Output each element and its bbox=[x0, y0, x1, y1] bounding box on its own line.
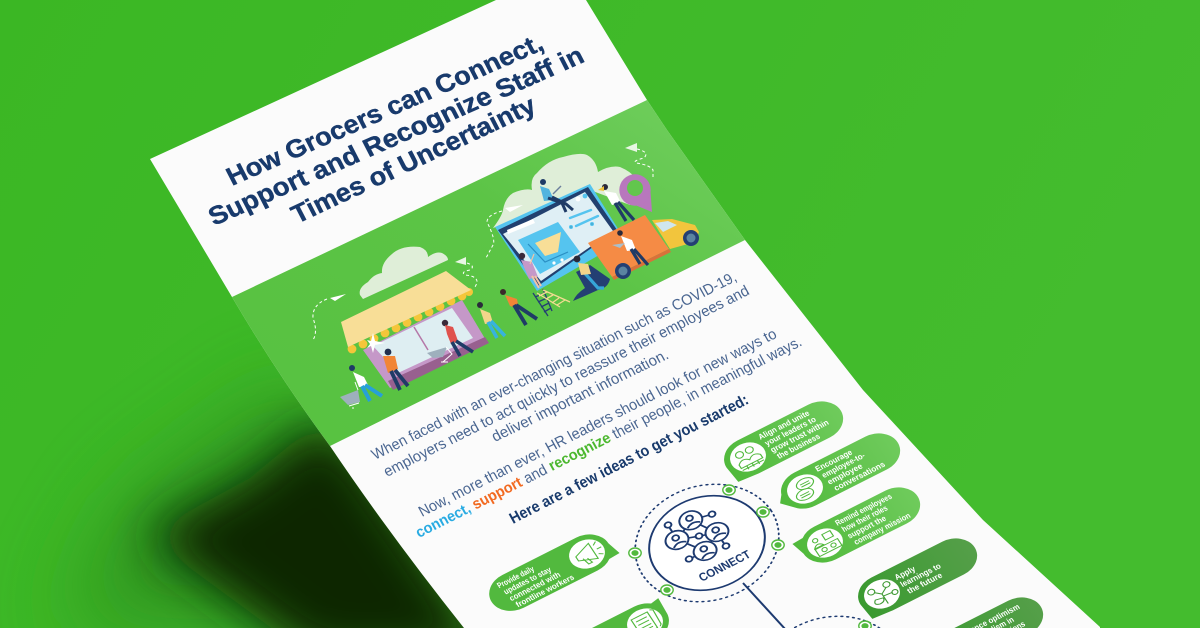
person sitting on monitor bbox=[540, 179, 573, 212]
icon: presenter at desk bbox=[809, 530, 842, 557]
dashed flight path left bbox=[313, 299, 327, 340]
title: Times of Uncertainty bbox=[287, 91, 541, 230]
window divider bbox=[414, 327, 428, 350]
bubble: daily updates: connected with bbox=[507, 570, 562, 603]
network people icon bbox=[655, 500, 739, 572]
man with phone bbox=[500, 289, 537, 325]
woman in yellow bbox=[477, 302, 505, 338]
bubble: daily updates: updates to stay bbox=[502, 565, 554, 596]
title: Support and Recognize Staff in bbox=[204, 41, 589, 232]
cloud behind monitor bbox=[493, 154, 637, 228]
bubble: employee conversations: Encourage bbox=[813, 448, 854, 473]
address bar bbox=[507, 219, 535, 234]
intro text block: employers need to act quickly to reassure their employees and bbox=[380, 282, 752, 480]
paper plane right bbox=[455, 257, 466, 265]
bubble: employee conversations: conversations bbox=[832, 460, 887, 493]
bubble: company mission: how their roles bbox=[840, 504, 889, 534]
cart in window bbox=[427, 347, 452, 362]
shop wall bbox=[363, 300, 487, 388]
connect hub diagram bbox=[611, 462, 803, 624]
next hub dotted ring bbox=[734, 594, 926, 628]
shop base bbox=[388, 337, 489, 390]
illustration: storefront scene bbox=[313, 247, 537, 408]
cart frame and wheels bbox=[528, 244, 568, 265]
icon: growth tree bbox=[867, 579, 902, 609]
shop awning bbox=[341, 271, 471, 347]
bubble: align leaders: your leaders to bbox=[763, 415, 818, 448]
bubble: apply learnings: Apply bbox=[893, 564, 918, 582]
icon: checklist bbox=[631, 609, 663, 628]
dashed flight path by monitor bbox=[486, 211, 502, 258]
second paragraph: Now, more than ever, HR leaders should look for new ways to bbox=[415, 325, 780, 520]
bubble: apply learnings bbox=[850, 531, 985, 621]
bubble: apply learnings: learnings to bbox=[899, 561, 943, 589]
cart panel bbox=[518, 222, 580, 274]
bubble: align leaders: grow trust within bbox=[769, 418, 830, 454]
bubble: align leaders: the business bbox=[775, 432, 822, 461]
woman on ladder bbox=[519, 253, 541, 288]
monitor frame bbox=[495, 184, 625, 291]
bubble: employee conversations: employee-to- bbox=[820, 451, 867, 480]
woman sitting bbox=[573, 256, 610, 301]
screen text lines bbox=[570, 210, 598, 228]
outer dotted ring bbox=[611, 462, 803, 624]
monitor bezel bbox=[498, 187, 617, 286]
bubble: company mission: company mission bbox=[852, 511, 912, 547]
paper plane left bbox=[330, 294, 346, 301]
navy ladder bbox=[533, 289, 552, 316]
monitor screen bbox=[503, 192, 613, 281]
paper plane top bbox=[625, 143, 637, 152]
cloud above shop bbox=[360, 247, 448, 299]
ring nodes bbox=[629, 485, 871, 628]
cargo box lower edge bbox=[612, 249, 671, 280]
shop window bbox=[373, 308, 473, 373]
title: How Grocers can Connect, bbox=[222, 29, 548, 192]
bubble: company mission bbox=[789, 480, 928, 572]
dashed flight path top bbox=[635, 149, 653, 177]
person with megaphone bbox=[598, 184, 634, 221]
illustration: online store scene bbox=[486, 143, 699, 316]
cart basket bbox=[535, 232, 561, 256]
bubble: align leaders: Align and unite bbox=[756, 409, 811, 441]
bubble: apply learnings: the future bbox=[905, 571, 944, 595]
connect label: CONNECT bbox=[696, 548, 753, 584]
icon: megaphone bbox=[572, 539, 607, 567]
browser dots bbox=[576, 194, 587, 201]
intro text block: When faced with an ever-changing situation such as COVID-19, bbox=[368, 268, 740, 463]
connector line bbox=[743, 583, 786, 628]
sparkle bbox=[367, 333, 385, 353]
bubble: employee conversations bbox=[768, 426, 908, 518]
subheading: Here are a few ideas to get you started: bbox=[506, 390, 751, 527]
person with laptop at truck bbox=[612, 230, 648, 265]
paper sheet bbox=[150, 0, 1100, 628]
dashed flight path right bbox=[463, 263, 477, 287]
man with shopping cart bbox=[340, 365, 382, 408]
bubble: align leaders bbox=[716, 394, 851, 484]
bubble: balance optimism bbox=[916, 590, 1051, 628]
delivery van cab bbox=[652, 219, 699, 249]
bubble: company mission: support the bbox=[846, 514, 888, 540]
bubble: daily updates bbox=[481, 525, 623, 618]
icon: team group bbox=[732, 444, 765, 472]
bubble: daily updates: frontline workers bbox=[514, 573, 576, 609]
van cargo box bbox=[588, 215, 669, 277]
intro text block bbox=[368, 268, 752, 480]
bubble: daily updates: Provide daily bbox=[495, 564, 536, 590]
intro text block: deliver important information. bbox=[488, 346, 672, 445]
paper drop shadow bbox=[60, 380, 500, 628]
yellow ladder bbox=[537, 290, 570, 307]
shopper in window bbox=[442, 320, 473, 356]
icon: speech bubbles bbox=[789, 475, 821, 503]
bubble: company mission: Remind employees bbox=[833, 492, 894, 527]
paper plane by monitor bbox=[505, 205, 523, 212]
map pin bbox=[619, 174, 652, 212]
panel: green illustration band bbox=[232, 100, 745, 446]
rear wheel bbox=[615, 263, 631, 279]
second paragraph: connect, support and recognize their people, in meaningful ways. bbox=[412, 333, 805, 541]
awning scallops bbox=[348, 288, 473, 353]
man in orange bbox=[383, 349, 408, 390]
bubble: feedback checklist bbox=[539, 595, 678, 628]
bubble: employee conversations: employee bbox=[826, 462, 864, 486]
inner ring bbox=[629, 477, 785, 609]
